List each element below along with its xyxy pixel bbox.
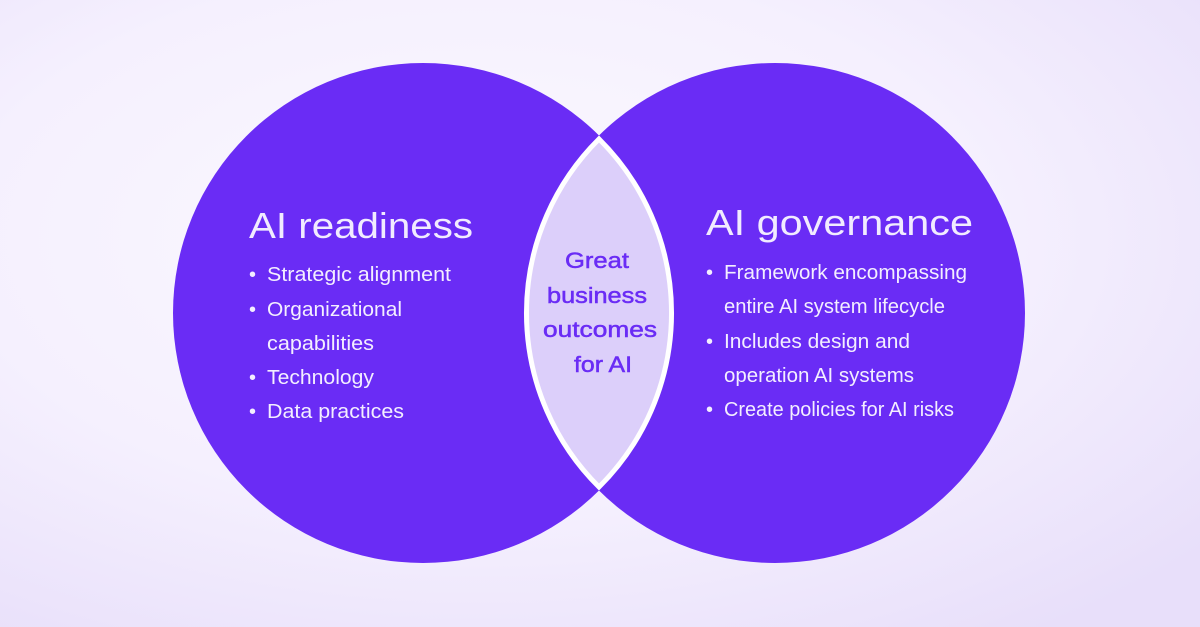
text block: AI governance list: Includes design and <box>724 331 910 353</box>
text block: AI readiness list: Data practices <box>267 401 404 423</box>
text block: AI governance list: Create policies for AI risks <box>724 399 954 421</box>
heading: AI readiness: AI readiness <box>249 205 473 246</box>
text block: AI readiness list: Strategic alignment <box>267 264 451 286</box>
text block: AI governance list: • <box>706 262 713 284</box>
text block: AI readiness list <box>249 264 451 423</box>
text block: AI readiness list: • <box>249 367 256 389</box>
panel: overlap lens <box>526 139 672 487</box>
text block: overlap label: outcomes <box>543 317 657 342</box>
panel: AI readiness circle <box>173 63 673 563</box>
text block: AI readiness list: capabilities <box>267 333 374 355</box>
text block: AI governance list <box>706 262 967 421</box>
text block: AI readiness list: • <box>249 264 256 286</box>
text block: AI governance list: • <box>706 331 713 353</box>
text block: AI readiness list: Organizational <box>267 299 402 321</box>
text block: overlap label <box>543 248 657 377</box>
text block: AI readiness list: • <box>249 299 256 321</box>
text block: AI readiness list: • <box>249 401 256 423</box>
panel: AI governance circle <box>525 63 1025 563</box>
text block: AI governance list: operation AI systems <box>724 365 914 387</box>
text block: overlap label: for AI <box>574 352 632 377</box>
text block: AI governance list: • <box>706 399 713 421</box>
heading: AI governance: AI governance <box>706 202 973 243</box>
text block: overlap label: Great <box>565 248 629 273</box>
text block: overlap label: business <box>547 283 647 308</box>
text block: AI governance list: Framework encompassing <box>724 262 967 284</box>
text block: AI readiness list: Technology <box>267 367 374 389</box>
text block: AI governance list: entire AI system lifecycle <box>724 296 945 318</box>
